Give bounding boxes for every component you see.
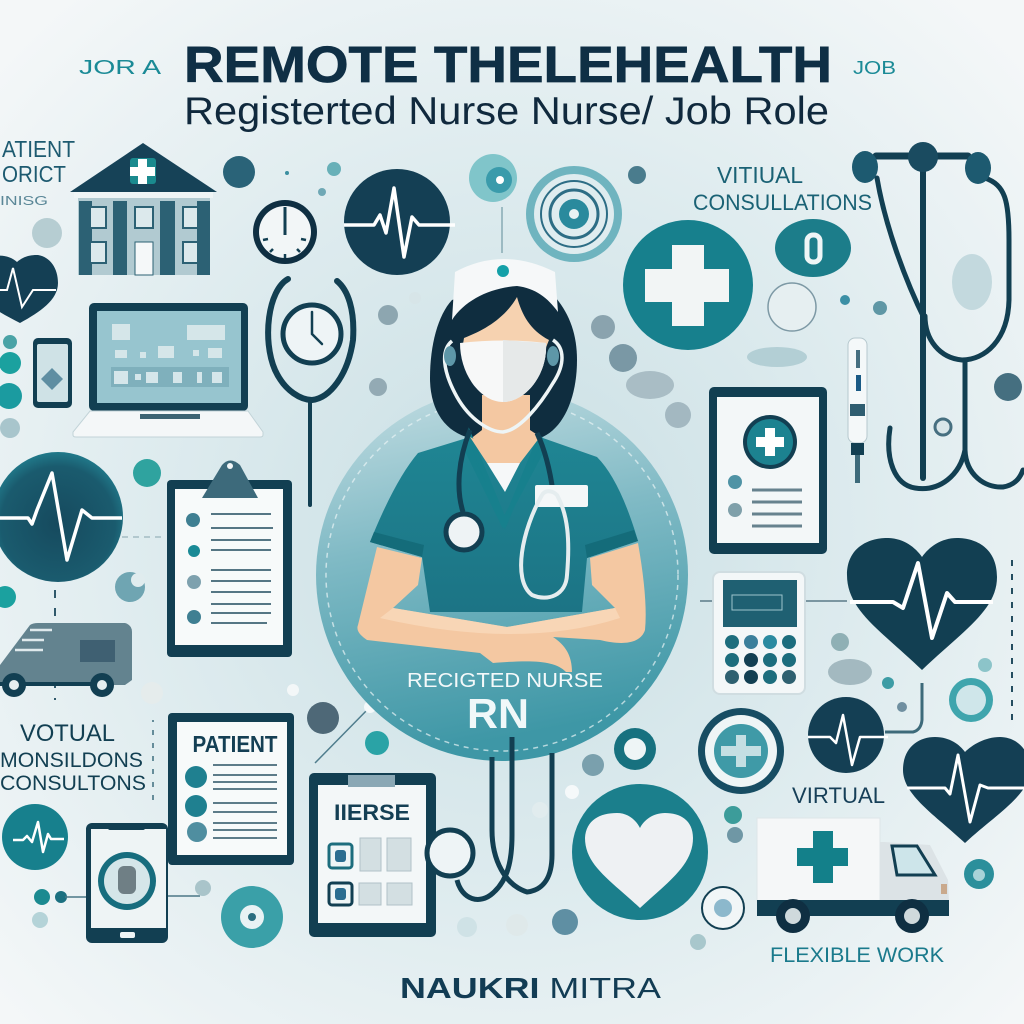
icon: patient clipboard — [168, 713, 294, 865]
icon: teal medical cross — [623, 220, 753, 350]
icon: clipboard left — [167, 460, 292, 657]
icon: calculator device — [713, 572, 805, 694]
title: JOR A — [79, 57, 162, 79]
icon: small ring lower right — [702, 887, 744, 929]
label: patient work — [0, 136, 75, 208]
icon: stethoscope centre left — [268, 279, 353, 505]
title: REMOTE THELEHEALTH — [184, 36, 832, 93]
scrubs — [370, 437, 638, 612]
face — [462, 297, 549, 350]
icon: teal small badge — [221, 886, 283, 948]
panel: central nurse — [316, 259, 688, 761]
label: virtual consultations top: CONSULLATIONS — [693, 190, 872, 215]
icon: laptop — [73, 303, 263, 437]
title — [79, 36, 896, 133]
icon: nurse tablet: IIERSE — [334, 800, 410, 825]
decorative scattered blobs — [0, 156, 1022, 950]
label: patient work: ORICT — [2, 161, 66, 187]
icon: delivery truck — [757, 818, 949, 933]
icon: target rings — [526, 166, 622, 262]
name badge — [535, 485, 588, 507]
icon: teal cone — [469, 154, 517, 202]
title: Registerted Nurse Nurse/ Job Role — [184, 90, 829, 133]
label: patient work: ATIENT — [2, 136, 75, 162]
neck — [469, 395, 545, 485]
icon: heart right lower — [903, 737, 1024, 843]
label: virtual consultations top — [693, 162, 872, 215]
nurse cap — [452, 259, 558, 320]
icon: heart left — [0, 255, 58, 323]
icon: ring — [949, 678, 993, 722]
icon: teal small circle — [964, 859, 994, 889]
label: virtual consultations top: VITIUAL — [717, 162, 803, 188]
icon: clock — [253, 200, 317, 264]
footer brand: NAUKRI MITRA — [400, 973, 662, 1005]
icon: phone with portrait — [86, 823, 168, 943]
stethoscope on nurse — [445, 340, 562, 432]
icon: van left — [0, 623, 132, 697]
icon: patient clipboard: PATIENT — [192, 731, 278, 757]
panel: central nurse: RN — [467, 690, 529, 737]
label: flexible work: FLEXIBLE WORK — [770, 944, 944, 967]
icon: heartbeat circle left — [0, 452, 123, 582]
label: virtual consultons: VOTUAL — [20, 720, 115, 747]
title: JOB — [853, 58, 896, 78]
label: virtual consultons: MONSILDONS — [0, 749, 143, 772]
icon: pen injector — [848, 338, 867, 483]
icon: large stethoscope right — [852, 142, 1023, 489]
halo circle — [316, 389, 688, 761]
face mask — [460, 340, 546, 402]
icon: heartbeat circle top — [344, 169, 455, 275]
icon: tablet right — [709, 387, 827, 554]
rn label: RECIGTED NURSE — [407, 670, 603, 692]
icon: teal oval badge — [775, 219, 851, 277]
icon: nurse tablet — [309, 773, 436, 937]
label: virtual consultons — [0, 720, 146, 795]
label: virtual: VIRTUAL — [792, 783, 885, 808]
icon: hospital building — [70, 143, 217, 275]
icon: heartbeat circle bottom left — [2, 804, 68, 870]
arms — [357, 543, 646, 672]
label: virtual consultons: CONSULTONS — [0, 772, 146, 795]
icon: heart right large — [847, 538, 997, 670]
icon: cross ring — [698, 708, 784, 794]
dashed ring — [326, 399, 678, 751]
icon: stethoscope bottom centre — [427, 737, 552, 899]
collar — [468, 437, 541, 523]
icon: heartbeat small circle — [808, 683, 922, 773]
icon: small phone — [33, 338, 72, 408]
icon: teal heart circle — [572, 784, 708, 920]
hair — [430, 280, 577, 438]
label: patient work: INISG — [0, 193, 48, 208]
sleeves — [370, 532, 424, 557]
